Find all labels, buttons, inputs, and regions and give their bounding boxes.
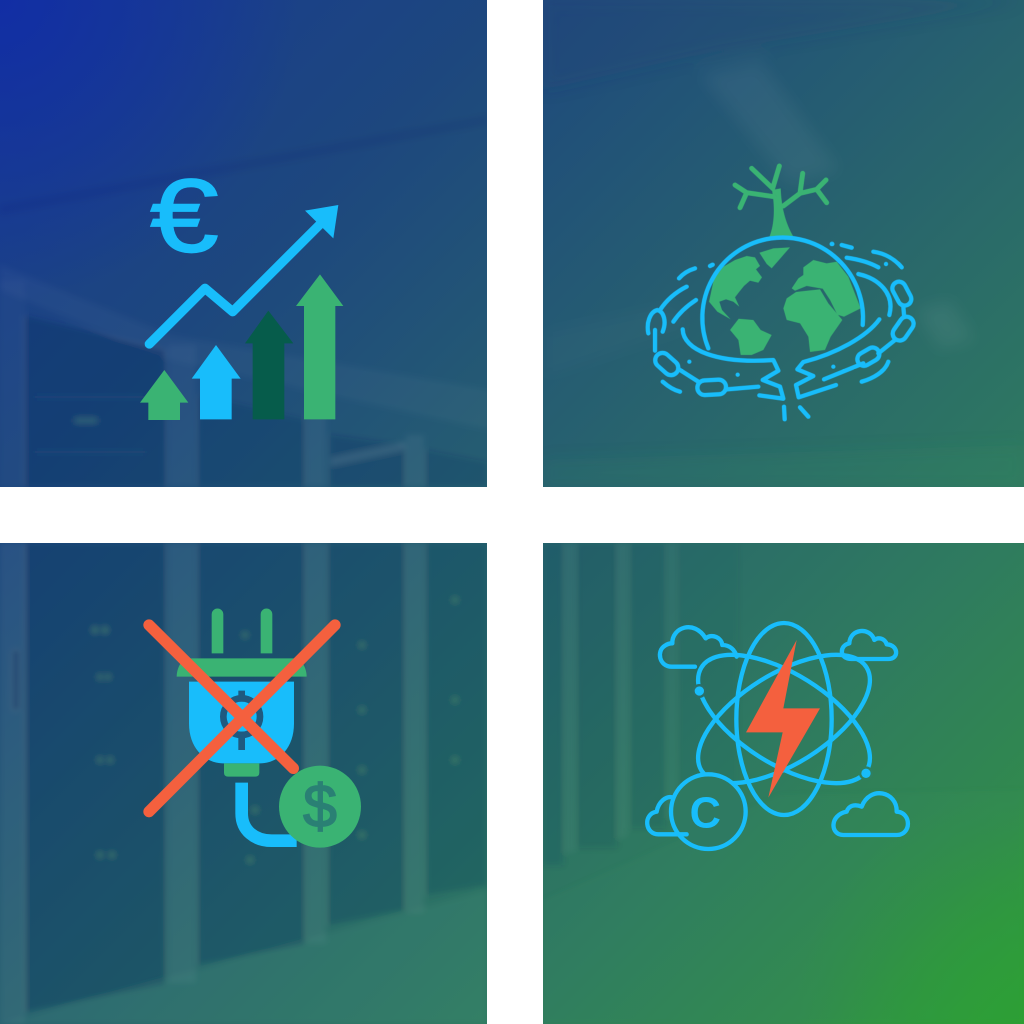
- photo backdrop: data center corridor: [0, 0, 490, 487]
- red cross-out: [149, 625, 335, 812]
- plug coin mark: [223, 691, 260, 750]
- cyan arrow: [192, 345, 241, 419]
- chain links: [648, 279, 916, 395]
- cloud bottom right: [833, 793, 908, 835]
- continents: [709, 247, 861, 355]
- motion dashes: [660, 244, 902, 419]
- cloud top left: [660, 627, 737, 667]
- dark green arrow: [245, 311, 293, 419]
- small green arrow: [140, 370, 188, 420]
- plug base plate: [177, 658, 307, 677]
- carbon cloud: C: [690, 790, 721, 838]
- tree growing from globe: [735, 166, 827, 239]
- panel: unplugged funding: [0, 543, 487, 1024]
- euro symbol: €: [150, 158, 218, 274]
- icon: crossed-out plug with dollar: [149, 608, 361, 848]
- atom orbits: [678, 623, 890, 815]
- panel: globe in broken chains: [543, 0, 1024, 487]
- globe outline: [702, 238, 863, 348]
- photo backdrop: ceiling with light fixture: [543, 0, 1024, 487]
- tall green arrow: [296, 274, 343, 419]
- plug prongs: [212, 608, 272, 653]
- electrons: [695, 686, 871, 778]
- cloud top right: [842, 631, 896, 659]
- dollar coin: [279, 766, 361, 848]
- dollar coin: $: [303, 772, 337, 840]
- carbon cloud: [647, 774, 746, 849]
- panel: rising costs: [0, 0, 490, 487]
- icon: euro and rising chart: [140, 158, 343, 420]
- icon: globe, tree and chain: [648, 166, 916, 419]
- cable: [242, 783, 297, 841]
- panel: energy and carbon: [543, 543, 1024, 1024]
- rising trend line with arrowhead: [149, 205, 338, 344]
- photo backdrop: server racks: [0, 543, 487, 1024]
- icon: atom, lightning and clouds: [647, 623, 908, 849]
- cracked ring: [683, 319, 879, 399]
- plug neck: [224, 763, 259, 777]
- photo backdrop: hazy server hall: [543, 543, 1024, 1024]
- plug body: [189, 682, 294, 763]
- lightning bolt: [746, 640, 820, 798]
